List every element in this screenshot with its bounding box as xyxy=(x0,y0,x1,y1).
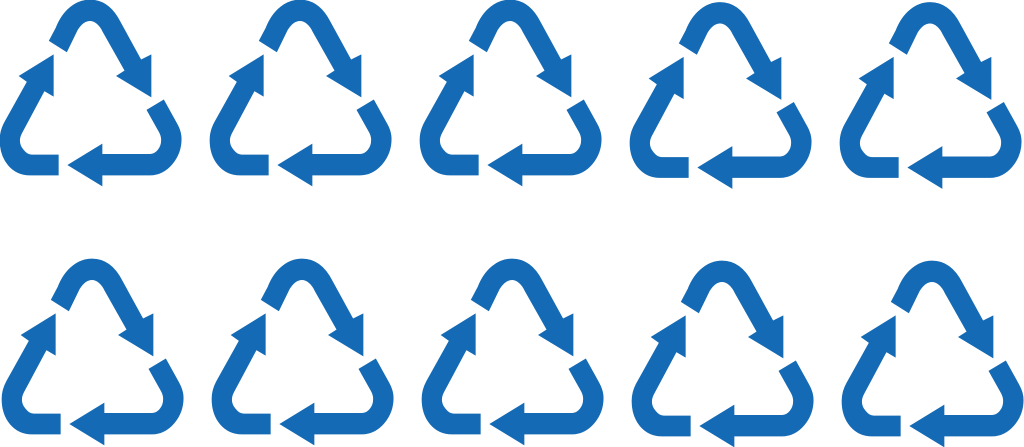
recycling symbol row 2 column 4 xyxy=(632,261,813,447)
recycling symbol row 1 column 4 xyxy=(630,2,811,188)
recycling symbol row 2 column 3 xyxy=(422,259,603,445)
recycling symbol row 1 column 3 xyxy=(420,0,601,186)
recycling symbol row 2 column 2 xyxy=(212,259,393,445)
recycling symbol row 1 column 2 xyxy=(210,0,391,186)
recycling symbol row 1 column 1 xyxy=(0,0,181,186)
recycling symbol row 1 column 5 xyxy=(840,2,1021,188)
recycling symbol row 2 column 5 xyxy=(842,261,1023,447)
recycling symbol row 2 column 1 xyxy=(2,259,183,445)
